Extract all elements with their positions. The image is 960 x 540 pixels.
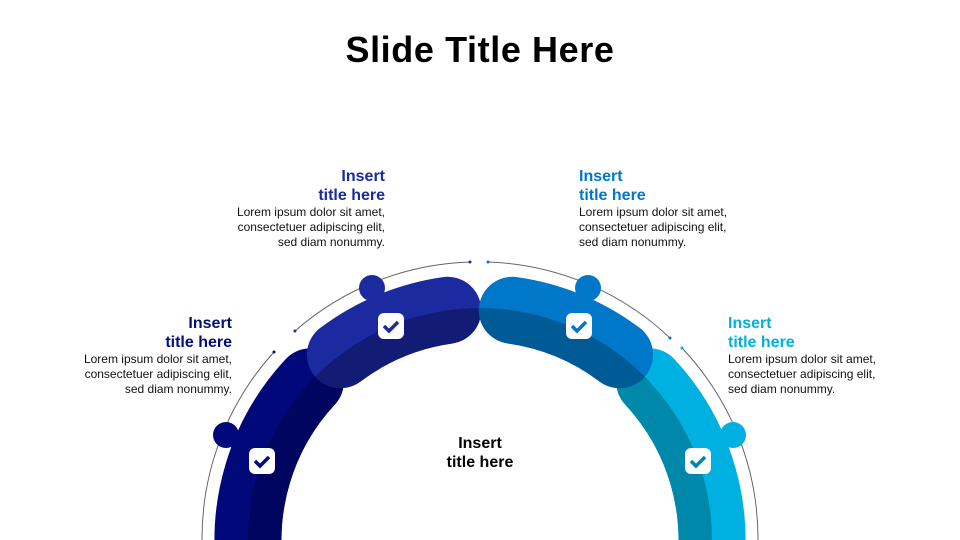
- text block: left: Insert: [188, 315, 232, 332]
- center title: Insert: [458, 435, 502, 452]
- text block: right: Lorem ipsum dolor sit amet,: [728, 352, 876, 366]
- icon: check right: [685, 448, 711, 474]
- text block: right: Insert: [728, 315, 772, 332]
- text block: top-right: Lorem ipsum dolor sit amet,: [579, 205, 727, 219]
- text block: top-left: consectetuer adipiscing elit,: [238, 220, 385, 234]
- center title: [446, 435, 513, 471]
- segment: left: [213, 382, 310, 540]
- icon: check top-left: [378, 313, 404, 339]
- segment: right: [650, 382, 746, 540]
- text block: right: [728, 315, 876, 396]
- text block: right: consectetuer adipiscing elit,: [728, 367, 875, 381]
- text block: right: sed diam nonummy.: [728, 382, 835, 396]
- text block: top-left: title here: [318, 187, 385, 204]
- text block: top-left: sed diam nonummy.: [278, 235, 385, 249]
- icon: check left: [249, 448, 275, 474]
- text block: right: title here: [728, 334, 795, 351]
- title: Slide Title Here: [345, 29, 615, 70]
- text block: top-left: Insert: [341, 168, 385, 185]
- text block: top-right: title here: [579, 187, 646, 204]
- text block: top-right: [579, 168, 727, 249]
- diagram: [202, 260, 758, 540]
- text block: top-left: [237, 168, 385, 249]
- text block: top-right: sed diam nonummy.: [579, 235, 686, 249]
- text block: left: title here: [165, 334, 232, 351]
- center title: title here: [447, 454, 513, 471]
- text block: top-right: Insert: [579, 168, 623, 185]
- text block: left: consectetuer adipiscing elit,: [85, 367, 232, 381]
- segment: top-left: [340, 275, 448, 355]
- segment: top-right: [512, 275, 620, 355]
- icon: check top-right: [566, 313, 592, 339]
- text block: top-right: consectetuer adipiscing elit,: [579, 220, 726, 234]
- outer thin arc: [202, 260, 758, 540]
- text block: left: sed diam nonummy.: [125, 382, 232, 396]
- text block: top-left: Lorem ipsum dolor sit amet,: [237, 205, 385, 219]
- text block: left: Lorem ipsum dolor sit amet,: [84, 352, 232, 366]
- text block: left: [84, 315, 232, 396]
